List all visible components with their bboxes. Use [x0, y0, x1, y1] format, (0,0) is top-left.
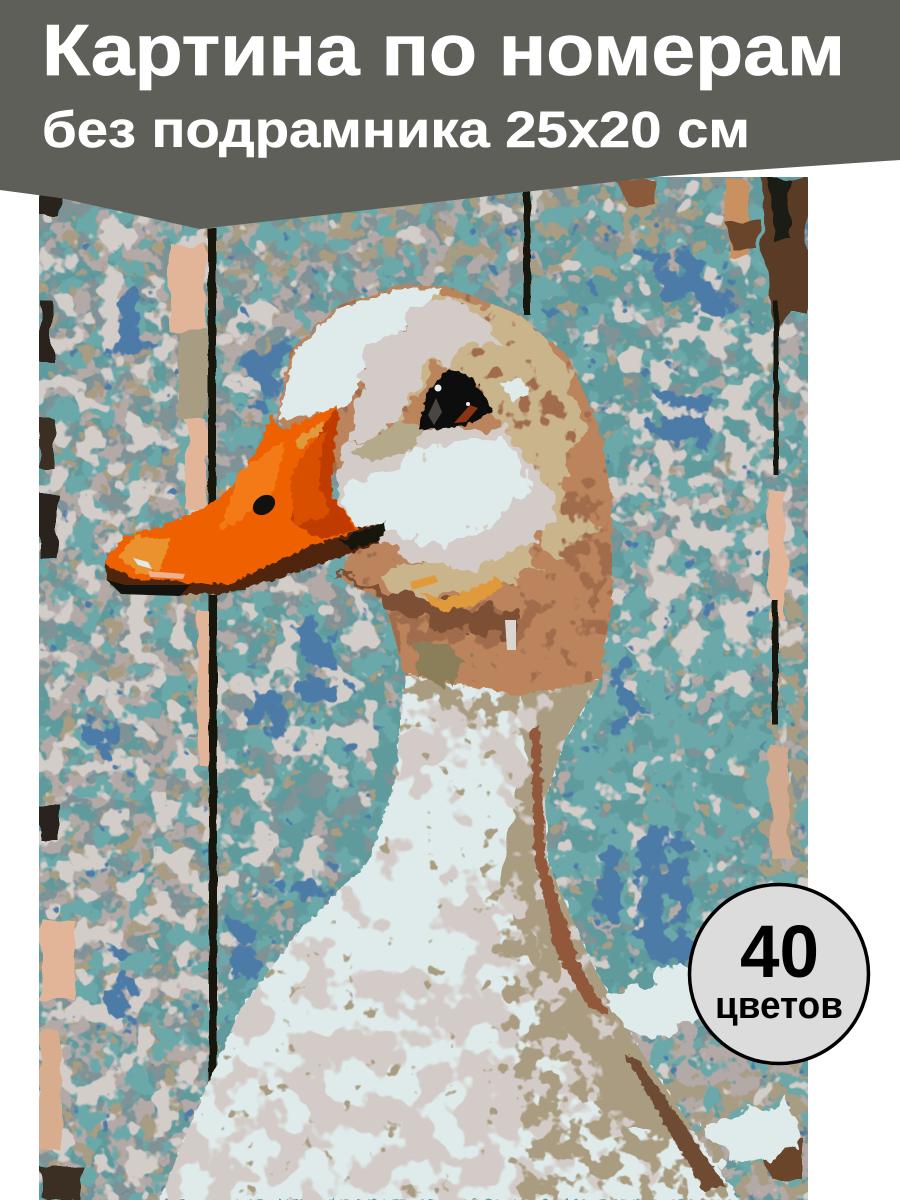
grey cap [345, 296, 500, 450]
black plank gaps [207, 191, 780, 1082]
duck neck and body [160, 670, 800, 1200]
brown patches [390, 380, 612, 650]
subtitle: без подрамника 25х20 см [42, 101, 750, 158]
eye [417, 368, 530, 430]
painted wooden background [39, 177, 808, 1200]
lower head shading [330, 572, 520, 640]
lower cheek tan [380, 540, 540, 600]
white cheek [340, 435, 528, 550]
orange throat marks [420, 577, 505, 612]
badge number: 40 [740, 910, 819, 993]
header banner [0, 0, 900, 229]
beak nostril [252, 494, 276, 516]
dark rust edges [39, 177, 808, 1200]
white crescent [279, 289, 440, 420]
badge: 40 colours [690, 884, 868, 1064]
duck beak [104, 405, 386, 596]
title: Картина по номерам [42, 11, 845, 91]
beak orange fill [104, 405, 359, 585]
tan crown [380, 290, 600, 560]
white throat feather [505, 620, 516, 650]
painting: duck paint-by-numbers artwork [39, 177, 808, 1200]
tan cheek patch [352, 420, 425, 462]
beak dark rim [104, 523, 386, 595]
head base [277, 285, 612, 695]
beak tip highlight [118, 535, 170, 575]
duck head [277, 285, 612, 695]
peach and tan vertical strips [40, 180, 790, 1150]
beak shading [290, 407, 356, 540]
badge label: цветов [715, 985, 843, 1027]
